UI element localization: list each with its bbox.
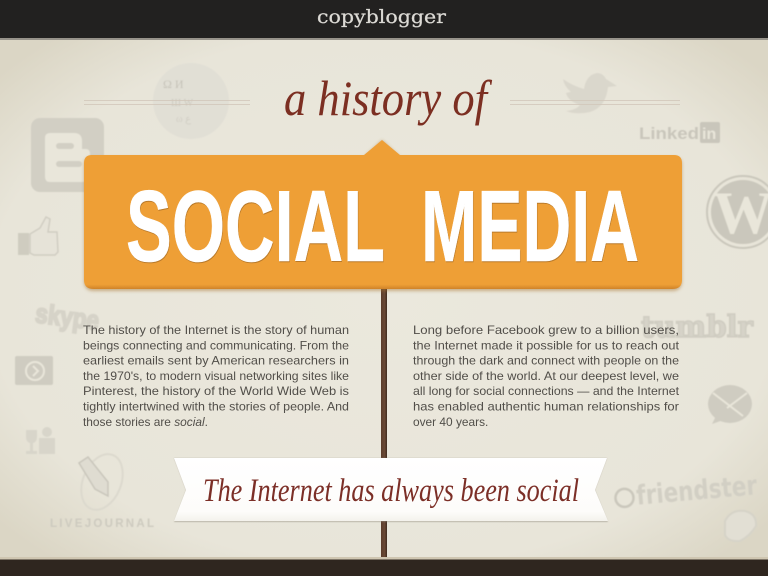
text block: left intro: earliest emails sent by American researchers in bbox=[83, 354, 349, 368]
text block: right intro: the Internet made it possible for us to reach out bbox=[413, 338, 680, 352]
icon: blogger bbox=[31, 118, 104, 192]
text block: right intro: through the dark and connect with people on the bbox=[413, 354, 679, 368]
text block: left intro: The history of the Internet is the story of human bbox=[83, 323, 349, 337]
text block: right intro: all long for social connections — and the Internet bbox=[413, 384, 680, 398]
logo: linkedin bbox=[639, 122, 720, 143]
ribbon banner bbox=[174, 458, 608, 522]
icon: people and glass bbox=[26, 427, 55, 454]
logo: tumblr: tumblr bbox=[641, 310, 754, 345]
logo: skype: skype bbox=[34, 298, 101, 336]
banner text: The Internet has always been social bbox=[203, 473, 579, 509]
text block: right intro: Long before Facebook grew to a billion users, bbox=[413, 323, 679, 337]
text block: right intro: has enabled authentic human relationships for bbox=[413, 400, 679, 414]
title: SOCIAL MEDIA: SOCIAL bbox=[126, 172, 386, 284]
brand name: copyblogger bbox=[317, 6, 447, 28]
icon: wikipedia globe: Ω И bbox=[163, 77, 184, 91]
header bar bbox=[0, 0, 768, 40]
icon: video play bbox=[15, 356, 53, 385]
footer wood strip bbox=[0, 557, 768, 576]
text block: left intro: those stories are social. bbox=[83, 415, 208, 429]
text block: right intro bbox=[413, 323, 680, 429]
icon: wikipedia globe: Ш W bbox=[171, 98, 194, 109]
icon: twitter bird bbox=[563, 73, 617, 113]
subtitle: a history of: a history of bbox=[284, 70, 492, 126]
text block: left intro bbox=[83, 323, 349, 429]
icon: bottom right logo bbox=[725, 511, 756, 541]
logo: livejournal bbox=[50, 448, 154, 530]
text block: left intro: beings connecting and communicating. From the bbox=[83, 338, 349, 352]
title: SOCIAL MEDIA: MEDIA bbox=[422, 172, 640, 284]
text block: left intro: tightly intertwined with the stories of people. And bbox=[83, 400, 349, 414]
icon: wikipedia globe: ω ع bbox=[176, 114, 191, 125]
text block: left intro: Pinterest, the history of the World Wide Web is bbox=[83, 384, 349, 398]
title panel bbox=[84, 140, 682, 291]
center timeline stem bbox=[381, 285, 387, 557]
icon: wikipedia globe bbox=[153, 63, 229, 139]
title: SOCIAL MEDIA: SOCIAL bbox=[126, 171, 385, 283]
text block: right intro: other side of the world. At our deepest level, we bbox=[413, 369, 679, 383]
text block: left intro: the 1970's, to modern visual networking sites like bbox=[83, 369, 349, 383]
logo: linkedin: Linked bbox=[639, 124, 699, 143]
icon: thumbs up bbox=[18, 217, 58, 255]
logo: linkedin: in bbox=[702, 126, 716, 143]
icon: mail speech bubble bbox=[708, 385, 752, 424]
text block: right intro: over 40 years. bbox=[413, 415, 488, 429]
title rule lines bbox=[84, 100, 680, 104]
title: SOCIAL MEDIA: MEDIA bbox=[421, 171, 639, 283]
logo: livejournal: LIVEJOURNAL bbox=[50, 518, 154, 530]
